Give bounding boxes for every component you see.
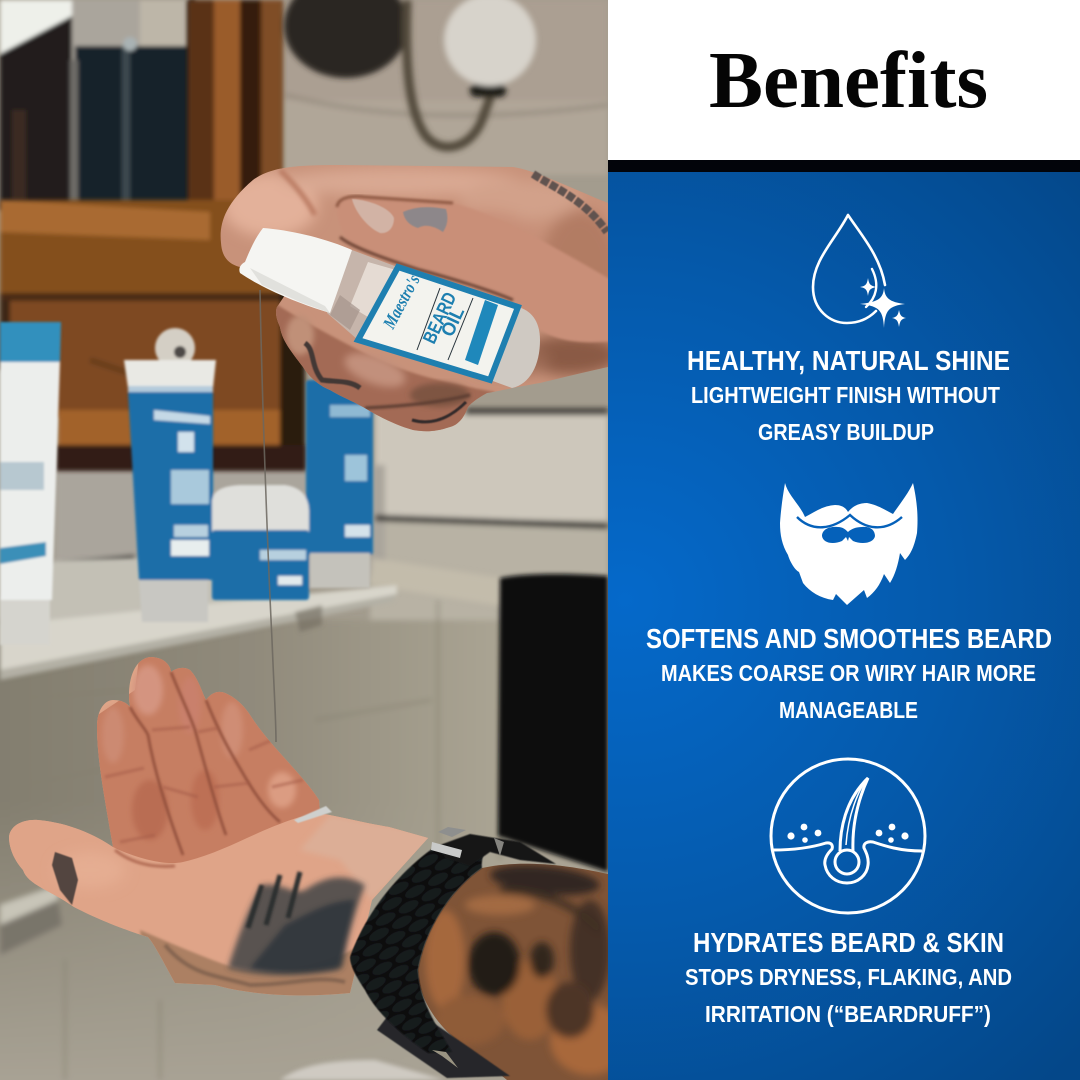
icon: water drop with sparkles — [813, 215, 906, 328]
black towel on towel bar — [370, 558, 608, 872]
number tattoo strokes — [248, 872, 300, 928]
description: MAKES COARSE OR WIRY HAIR MORE — [661, 660, 1036, 686]
bottle: Maestro's beard oil — [239, 228, 540, 388]
description — [661, 660, 1036, 723]
braided watch band and strap — [350, 827, 556, 1078]
bottle label — [358, 267, 518, 380]
left white tube — [0, 322, 61, 645]
description: IRRITATION (“BEARDRUFF”) — [705, 1001, 991, 1027]
forearm with tattoo sleeve — [418, 864, 608, 1080]
heading: HYDRATES BEARD & SKIN — [693, 927, 1004, 958]
finger separations and creases — [130, 672, 280, 855]
icon: beard and moustache — [780, 483, 918, 605]
index finger crease — [280, 170, 315, 215]
heading: HEALTHY, NATURAL SHINE — [687, 345, 1010, 376]
wooden mirror frame and cabinet — [0, 0, 306, 471]
thumb and palm — [0, 814, 440, 1000]
ring — [294, 806, 332, 823]
description: GREASY BUILDUP — [758, 419, 934, 445]
header panel — [608, 0, 1080, 160]
sink basin at bottom — [280, 1060, 445, 1080]
description: LIGHTWEIGHT FINISH WITHOUT — [691, 382, 1000, 408]
description — [691, 382, 1000, 445]
lower knuckle tattoo — [412, 402, 466, 422]
thumb knuckle tattoo — [403, 207, 447, 232]
benefit 3: hydrates — [685, 759, 1012, 1027]
white pump cap — [239, 228, 352, 313]
benefit 1: healthy shine — [687, 215, 1010, 445]
towel ring knob — [155, 328, 195, 368]
product name: BEARD — [419, 289, 461, 347]
description — [685, 964, 1012, 1027]
finger tattoo — [305, 343, 360, 388]
icon: hair follicle in circle — [771, 759, 925, 913]
black divider bar — [608, 160, 1080, 172]
benefit 2: softens beard — [646, 483, 1052, 723]
upper hand holding bottle — [220, 165, 608, 432]
thumb nail — [352, 199, 394, 233]
product name: OIL — [437, 304, 469, 340]
wrist tattoo — [228, 877, 365, 975]
product shelf — [0, 555, 397, 680]
title: Benefits — [709, 37, 988, 125]
lower hand with palm and fingers — [9, 657, 428, 996]
blue benefits panel — [608, 172, 1080, 1080]
wall sconce lamp — [284, 0, 536, 147]
hair creme tube — [124, 360, 216, 622]
thumb — [465, 208, 608, 344]
hair pomade jar — [212, 485, 309, 600]
brand name: Maestro's — [378, 271, 424, 333]
blurred bathroom background — [0, 0, 610, 1080]
description: STOPS DRYNESS, FLAKING, AND — [685, 964, 1012, 990]
lower wrist tan band — [140, 930, 360, 1000]
right blue tube — [306, 380, 373, 588]
photo panel: beard oil poured into hand in a bathroom — [0, 0, 630, 1080]
fingers — [97, 657, 326, 863]
description: MANAGEABLE — [779, 697, 918, 723]
oil stream — [260, 290, 276, 742]
thumb tattoo — [52, 852, 78, 905]
mirror with dark reflection — [0, 0, 195, 211]
gap behind bottle — [285, 225, 345, 290]
wrist chain tattoo — [533, 174, 607, 232]
glass neck and base — [327, 250, 400, 340]
blurred product tubes and jar — [0, 322, 373, 645]
lower fingers — [276, 305, 494, 432]
